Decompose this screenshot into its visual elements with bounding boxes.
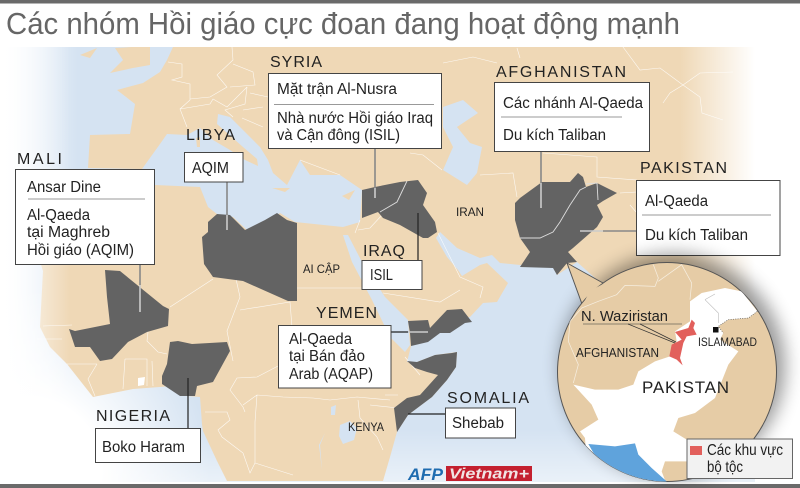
top bar [0,0,800,4]
label: IRAQ: IRAQ [363,243,405,260]
label: AI CẬP: AI CẬP [303,261,340,276]
group: active countries [69,173,617,432]
panel: Yemen groups [278,326,391,388]
panel: Nigeria groups [96,428,200,462]
leader lines [140,148,636,428]
logo: AFP: AFP [407,465,444,484]
inset map: Pakistan detail [558,262,776,488]
white internal borders on dark countries [380,181,598,238]
label: YEMEN: YEMEN [316,305,377,322]
label: AFGHANISTAN: AFGHANISTAN [496,64,626,81]
panel: Mali groups: Ansar Dine [27,179,101,196]
label: SYRIA: SYRIA [270,54,322,71]
bottom bar [0,484,800,488]
panel: Afghanistan groups: Du kích Taliban [503,127,606,144]
inset pointer [567,263,603,304]
tribal areas [669,320,697,365]
panel: Iraq groups [362,260,422,290]
label: LIBYA: LIBYA [186,127,235,144]
panel: Syria groups: Nhà nước Hồi giáo Iraq [277,110,433,127]
N. Waziristan callout [581,308,682,343]
N. Waziristan callout: N. Waziristan [581,308,668,325]
panel: Somalia groups [446,408,516,438]
legend: tribal areas: Các khu vực [707,442,783,459]
label: AFGHANISTAN inset: AFGHANISTAN [576,346,659,360]
country: Nigeria [162,341,230,396]
panel: Afghanistan groups [494,82,650,152]
Pakistan shape [573,288,757,485]
panel: Libya groups [184,152,243,182]
icon: Islamabad marker [713,327,718,332]
panel: Nigeria groups: Boko Haram [102,439,185,456]
panel: Iraq groups: ISIL [370,267,393,284]
panel: Pakistan groups: Al-Qaeda [645,193,708,210]
label: SOMALIA: SOMALIA [447,390,529,407]
inset circle [558,262,776,482]
panel: Syria groups: Mặt trận Al-Nusra [277,81,397,98]
Arabian Sea in inset [588,443,667,482]
label: MALI: MALI [17,151,62,168]
label: PAKISTAN: PAKISTAN [640,160,727,177]
panel: Pakistan groups [636,180,780,256]
label: PAKISTAN inset: PAKISTAN [642,378,729,397]
panel: Mali groups: Al-Qaeda [27,207,90,224]
panel: Somalia groups: Shebab [452,415,504,432]
panel: Afghanistan groups: Các nhánh Al-Qaeda [503,95,643,112]
label: ISLAMABAD: ISLAMABAD [698,337,757,349]
African lakes [319,405,357,470]
panel: Syria groups: và Cận đông (ISIL) [277,127,400,144]
label: IRAN: IRAN [456,205,484,219]
country borders [37,47,733,475]
panel: Pakistan groups: Du kích Taliban [645,227,748,244]
panel: Mali groups [16,170,154,264]
legend: tribal areas: bộ tộc [707,459,743,476]
country: Afghanistan and Pakistan [515,173,617,275]
logo: Vietnam+: Vietnam+ [449,466,529,482]
panel: Mali groups: tại Maghreb [27,224,110,241]
country: Libya [202,213,297,301]
legend: tribal areas [687,439,792,478]
country: Yemen [408,309,472,346]
Red Sea [343,235,410,352]
panel: Yemen groups: Arab (AQAP) [289,366,373,383]
label: KENYA: KENYA [348,420,384,434]
Caspian Sea [443,100,482,185]
panel: Libya groups: AQIM [192,160,229,177]
label: NIGERIA: NIGERIA [96,408,170,425]
panel: Syria groups [268,74,442,148]
panel: Yemen groups: Al-Qaeda [289,331,352,348]
country: Syria and Iraq [362,180,437,238]
title: Các nhóm Hồi giáo cực đoan đang hoạt động mạnh [6,7,680,41]
country: Somalia [394,352,457,432]
country: Mali [69,270,169,361]
shadow behind inset map [561,254,785,478]
panel: Yemen groups: tại Bán đảo [289,348,365,365]
panel: Mali groups: Hồi giáo (AQIM) [27,242,134,259]
